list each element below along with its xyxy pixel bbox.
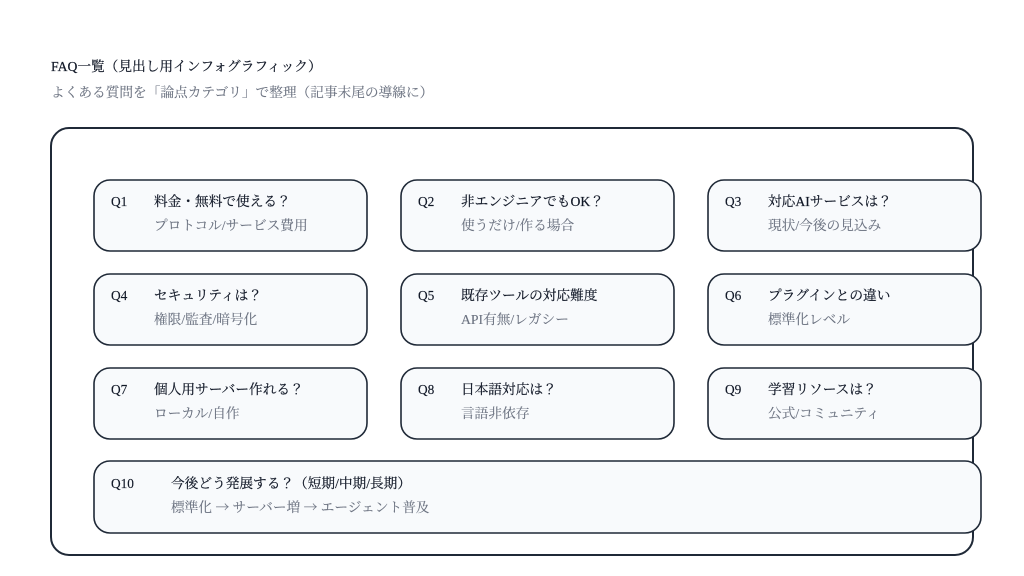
card: Q10 xyxy=(94,461,981,533)
card: Q2: 使うだけ/作る場合 xyxy=(461,217,575,233)
card: Q1: Q1 xyxy=(111,194,127,209)
card: Q2: Q2 xyxy=(418,194,434,209)
card: Q4: 権限/監査/暗号化 xyxy=(154,311,258,327)
card: Q2 xyxy=(401,180,674,251)
card: Q8: Q8 xyxy=(418,382,435,397)
card: Q10: Q10 xyxy=(111,476,134,491)
card: Q1: 料金・無料で使える？ xyxy=(154,193,291,209)
card: Q8 xyxy=(401,368,674,439)
card: Q7: ローカル/自作 xyxy=(154,406,240,421)
card: Q5: Q5 xyxy=(418,288,435,303)
card: Q3 xyxy=(708,180,981,251)
card: Q9 xyxy=(708,368,981,439)
panel: FAQ frame xyxy=(51,128,973,555)
heading: よくある質問を「論点カテゴリ」で整理（記事末尾の導線に） xyxy=(51,84,433,100)
card: Q5: 既存ツールの対応難度 xyxy=(461,287,598,303)
card: Q6: 標準化レベル xyxy=(768,311,850,327)
card: Q5: API有無/レガシー xyxy=(461,312,569,327)
card: Q3: Q3 xyxy=(725,194,742,209)
card: Q3: 現状/今後の見込み xyxy=(768,217,881,233)
card: Q1 xyxy=(94,180,367,251)
card: Q6: Q6 xyxy=(725,288,742,303)
card: Q6: プラグインとの違い xyxy=(768,288,890,303)
card: Q5 xyxy=(401,274,674,345)
card: Q9: 学習リソースは？ xyxy=(768,382,877,397)
card: Q7 xyxy=(94,368,367,439)
card: Q4: セキュリティは？ xyxy=(154,288,262,303)
card: Q8: 言語非依存 xyxy=(461,406,530,421)
card: Q7: Q7 xyxy=(111,382,128,397)
card: Q8: 日本語対応は？ xyxy=(461,381,557,397)
card: Q7: 個人用サーバー作れる？ xyxy=(154,382,304,397)
card: Q2: 非エンジニアでもOK？ xyxy=(461,194,604,209)
card: Q1: プロトコル/サービス費用 xyxy=(154,217,308,233)
card: Q9: 公式/コミュニティ xyxy=(768,406,880,421)
card: Q10: 標準化 → サーバー増 → エージェント普及 xyxy=(171,496,430,516)
card: Q3: 対応AIサービスは？ xyxy=(768,193,892,209)
heading xyxy=(51,59,433,100)
card: Q10: 今後どう発展する？（短期/中期/長期） xyxy=(171,475,411,491)
card: Q6 xyxy=(708,274,981,345)
card: Q9: Q9 xyxy=(725,382,742,397)
card: Q4 xyxy=(94,274,367,345)
heading: FAQ一覧（見出し用インフォグラフィック） xyxy=(51,59,322,74)
card: Q4: Q4 xyxy=(111,288,128,303)
